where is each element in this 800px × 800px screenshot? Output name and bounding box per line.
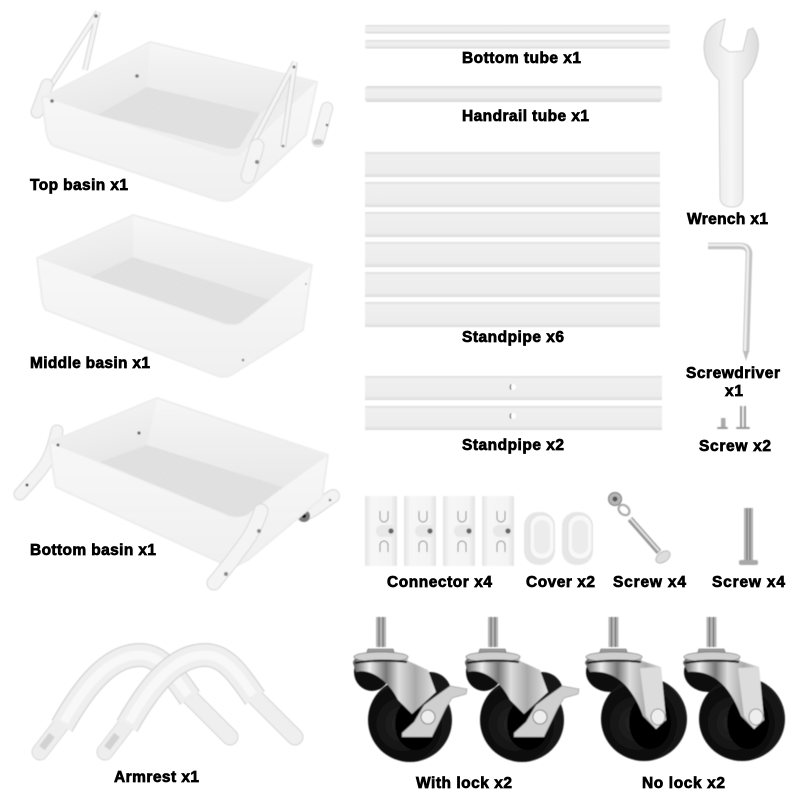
- panel: standpipe x2: [365, 376, 662, 454]
- icon: two standpipes: [365, 376, 662, 430]
- icon: covers: [524, 512, 593, 565]
- label: with lock: With lock x2: [416, 775, 512, 792]
- icon: casters without lock: [585, 617, 785, 761]
- panel: small screws: [699, 406, 771, 455]
- label: bottom basin: Bottom basin x1: [30, 542, 156, 559]
- label: cover: Cover x2: [526, 574, 595, 591]
- label: handrail tube: Handrail tube x1: [462, 108, 589, 125]
- icon: top basin: [37, 12, 328, 201]
- label: no lock: No lock x2: [642, 775, 725, 792]
- icon: connectors: [365, 496, 514, 566]
- panel: casters with lock: [353, 617, 579, 792]
- panel: screw with nut: [608, 492, 686, 591]
- icon: screwdriver: [708, 245, 749, 361]
- label: connector: Connector x4: [387, 574, 492, 591]
- label: armrest: Armrest x1: [114, 769, 199, 786]
- icon: middle basin: [37, 215, 312, 377]
- icon: small screws: [717, 406, 750, 429]
- icon: six standpipes: [365, 152, 660, 327]
- panel: covers: [524, 512, 595, 591]
- label: screw x2: Screw x2: [699, 438, 771, 455]
- icon: casters with lock: [353, 617, 579, 762]
- label: wrench: Wrench x1: [687, 211, 768, 228]
- icon: wrench: [704, 19, 758, 207]
- label: bottom tube: Bottom tube x1: [462, 50, 581, 67]
- panel: armrest: [40, 655, 295, 786]
- panel: casters without lock: [585, 617, 785, 792]
- panel: machine screw: [712, 508, 785, 591]
- panel: screwdriver: [686, 245, 780, 400]
- panel: standpipe x6: [365, 152, 660, 346]
- label: standpipe x2: Standpipe x2: [462, 437, 564, 454]
- label: screwdriver: x1: [725, 383, 743, 400]
- panel: bottom tube: [365, 25, 670, 67]
- label: screw x4: Screw x4: [712, 574, 785, 591]
- label: screw x4: Screw x4: [613, 574, 686, 591]
- icon: bolt with nut and washer: [608, 492, 672, 566]
- label: screwdriver: Screwdriver: [686, 365, 780, 382]
- label: top basin: Top basin x1: [30, 177, 128, 194]
- panel: handrail tube: [365, 86, 662, 125]
- icon: handrail tube: [365, 86, 662, 102]
- icon: bottom basin: [20, 398, 333, 583]
- panel: wrench: [687, 19, 768, 228]
- panel: middle basin: [30, 215, 312, 377]
- icon: machine screw: [739, 508, 758, 565]
- label: middle basin: Middle basin x1: [30, 355, 150, 372]
- panel: top basin: [30, 12, 328, 201]
- label: screwdriver: [686, 365, 780, 400]
- panel: connectors: [365, 496, 514, 591]
- icon: armrests: [40, 655, 295, 752]
- panel: bottom basin: [20, 398, 333, 583]
- label: standpipe x6: Standpipe x6: [462, 329, 564, 346]
- icon: bottom tubes: [365, 25, 670, 48]
